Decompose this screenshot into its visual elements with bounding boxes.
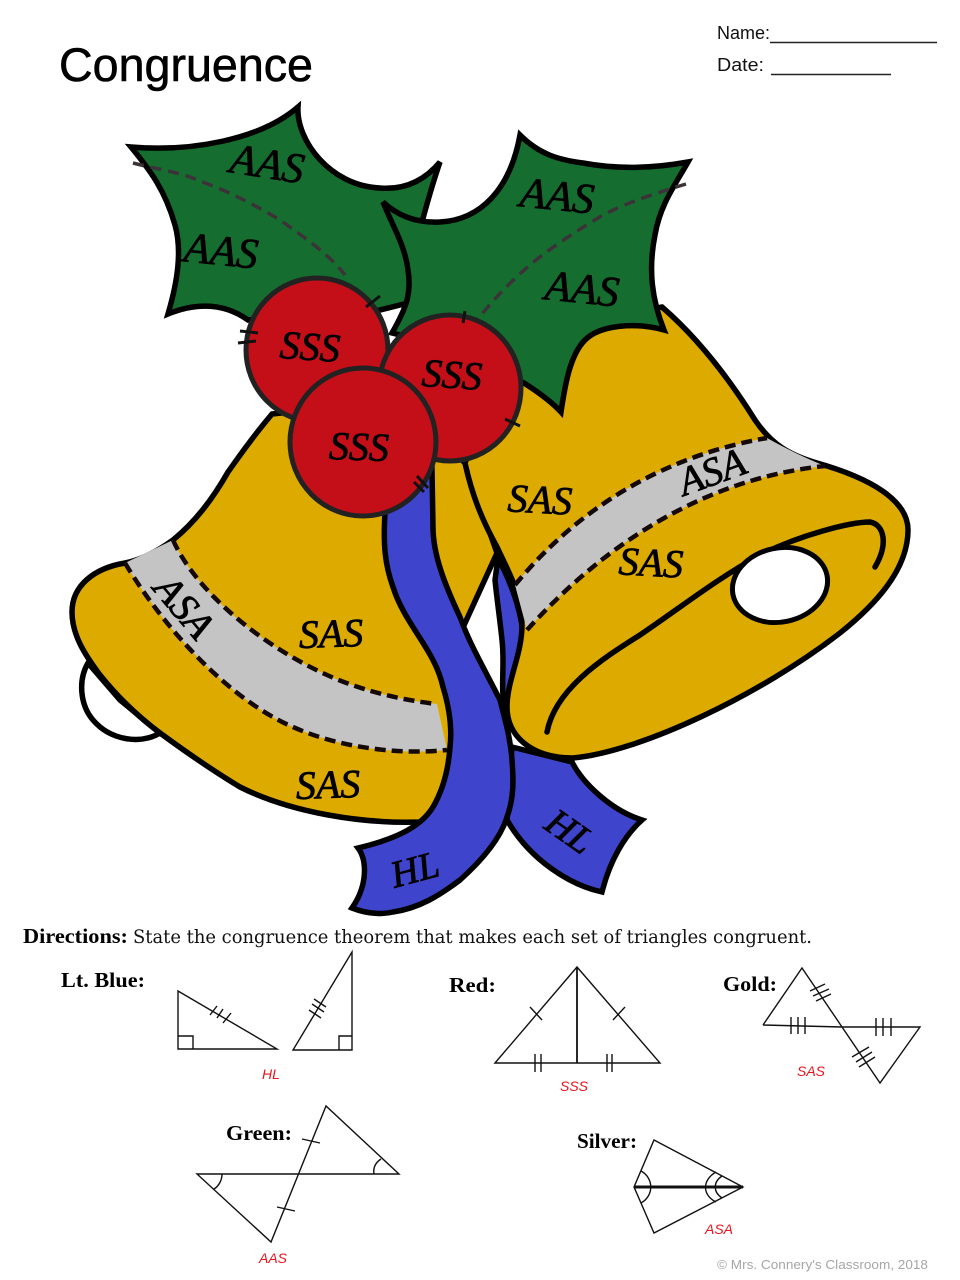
key: green triangles: [197, 1106, 399, 1266]
key: silver triangles: ASA: [704, 1221, 733, 1237]
key: green triangles: Green:: [226, 1121, 292, 1145]
directions: Directions:: [23, 924, 128, 948]
bells illustration: [72, 107, 908, 913]
key: light blue right triangles: Lt. Blue:: [61, 968, 145, 992]
leaf: left vein: [133, 163, 345, 275]
name and date fields: [717, 23, 937, 75]
berry: front: [290, 368, 436, 516]
title: Congruence: [59, 38, 313, 91]
key: light blue right triangles: HL: [262, 1066, 280, 1082]
key: gold triangles: [723, 968, 920, 1083]
key: silver triangles: [577, 1129, 743, 1237]
ribbon: thin back strip: [495, 558, 524, 708]
bell: right: [465, 307, 908, 758]
labels on the illustration: AAS: [540, 262, 621, 317]
leaf: left: [131, 107, 440, 330]
key: red triangles: SSS: [560, 1078, 589, 1094]
labels on the illustration: ASA: [669, 438, 752, 505]
berry: top right: [379, 315, 521, 461]
labels on the illustration: SSS: [328, 423, 390, 470]
labels on the illustration: SAS: [507, 475, 573, 524]
icon: left bell clapper: [82, 663, 160, 739]
bell: right rim: [547, 522, 883, 732]
icon: bell opening: [725, 539, 835, 631]
key: light blue right triangles: [61, 952, 352, 1082]
berry: top left: [246, 278, 388, 422]
leaf: right: [383, 135, 688, 412]
key: gold triangles: Gold:: [723, 972, 777, 996]
labels on the illustration: ASA: [143, 564, 224, 648]
bell: left: [72, 400, 497, 822]
silver band: right: [515, 438, 825, 630]
ribbon: right tail: [507, 747, 642, 892]
silver band: left: [125, 540, 447, 752]
labels on the illustration: HL: [537, 800, 601, 863]
labels on the illustration: HL: [385, 843, 444, 897]
name and date fields: Date:: [717, 55, 764, 75]
labels on the illustration: SSS: [421, 350, 484, 399]
labels on the illustration: AAS: [515, 169, 596, 224]
ribbon: main front: [352, 470, 513, 913]
directions: State the congruence theorem that makes each set of triangles congruent.: [133, 926, 812, 948]
berry tick marks: [238, 296, 520, 492]
copyright: © Mrs. Connery's Classroom, 2018: [717, 1258, 928, 1272]
key: red triangles: Red:: [449, 973, 496, 997]
key: red triangles: [449, 967, 660, 1094]
key: silver triangles: Silver:: [577, 1129, 637, 1153]
name and date fields: Name:: [717, 23, 770, 43]
labels on the illustration: SAS: [295, 761, 361, 808]
labels on the illustration: SAS: [618, 538, 684, 587]
key: green triangles: AAS: [258, 1250, 288, 1266]
labels on the illustration: [143, 135, 752, 897]
labels on the illustration: AAS: [224, 135, 307, 194]
labels on the illustration: SSS: [279, 322, 342, 371]
labels on the illustration: AAS: [179, 224, 260, 279]
labels on the illustration: SAS: [298, 610, 364, 657]
leaf: right vein: [482, 184, 686, 314]
key: gold triangles: SAS: [797, 1063, 826, 1079]
